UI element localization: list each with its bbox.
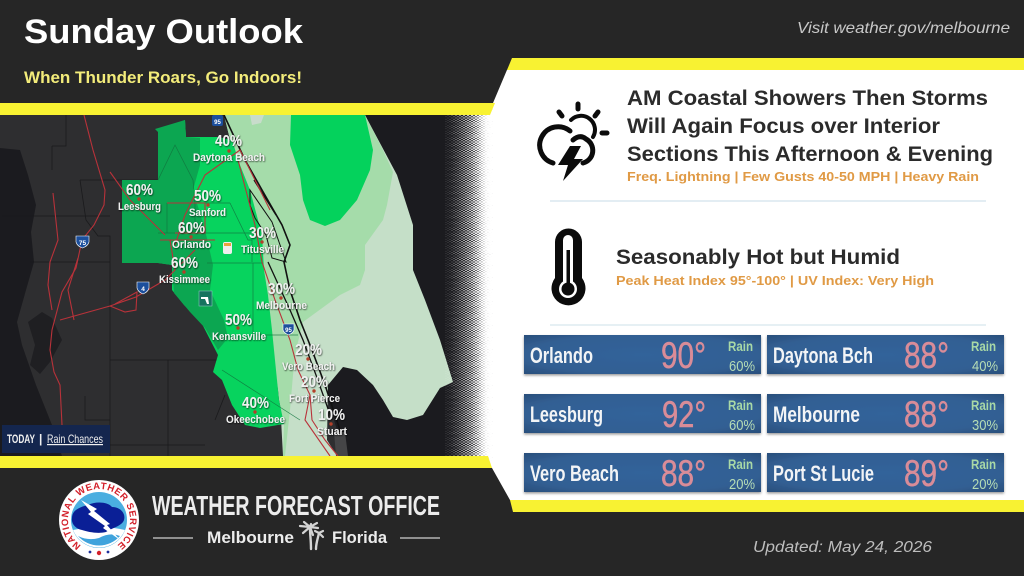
yellow band: top left bbox=[0, 103, 495, 115]
storm details: Freq. Lightning | Few Gusts 40-50 MPH | Heavy Rain bbox=[627, 169, 979, 184]
halftone transition bbox=[446, 100, 492, 470]
tile: Vero Beach: 88° bbox=[661, 453, 706, 494]
tile: Daytona Bch: Rain bbox=[971, 338, 996, 354]
tile: Vero Beach: Vero Beach bbox=[530, 461, 619, 486]
icon: palm tree bbox=[300, 522, 323, 549]
tile: Melbourne: Melbourne bbox=[773, 402, 860, 427]
icon: interstate 95 shield north bbox=[212, 115, 223, 126]
icon: interstate 75 shield bbox=[76, 236, 89, 248]
website link: Visit weather.gov/melbourne bbox=[797, 20, 1010, 37]
map: dark land south east bbox=[334, 432, 348, 456]
map: county lines bbox=[2, 115, 225, 456]
map: city labels: 10% bbox=[318, 407, 345, 424]
map: legend tag bbox=[2, 425, 110, 453]
logo text: location line bbox=[153, 522, 440, 549]
tile: Melbourne: 30% bbox=[972, 418, 998, 434]
map: darker green rain area bbox=[122, 120, 228, 350]
map: city labels bbox=[118, 133, 347, 438]
tile: Vero Beach: 20% bbox=[729, 477, 755, 493]
tile: Orlando: Rain bbox=[728, 338, 753, 354]
map: coastline bbox=[224, 115, 347, 456]
tile: Port St Lucie: Rain bbox=[971, 456, 996, 472]
heading: storms bbox=[627, 86, 993, 166]
map: city labels: 50% bbox=[225, 312, 252, 329]
panel: right white panel bbox=[493, 70, 1024, 500]
tile: Orlando: 90° bbox=[661, 335, 706, 376]
tile: Port St Lucie: Port St Lucie bbox=[773, 461, 874, 486]
map: city labels: 50% bbox=[194, 188, 221, 205]
tile: Daytona Bch: Daytona Bch bbox=[773, 343, 873, 368]
map: city labels: 20% bbox=[295, 342, 322, 359]
logo text: location line: Melbourne bbox=[207, 528, 294, 547]
icon: interstate 95 shield south bbox=[283, 324, 294, 335]
heading: heat: Seasonably Hot but Humid bbox=[616, 246, 900, 269]
tile: Daytona Bch bbox=[767, 335, 1004, 376]
panel: rain chance map bbox=[0, 115, 500, 456]
tile: Port St Lucie bbox=[767, 453, 1004, 494]
map: city labels: Daytona Beach bbox=[193, 152, 265, 164]
icon: interstate 75 shield: 75 bbox=[79, 240, 86, 247]
tile: Leesburg: Leesburg bbox=[530, 402, 603, 427]
tile: Melbourne bbox=[767, 394, 1004, 435]
map: city labels: 40% bbox=[242, 395, 269, 412]
map: pale patch bbox=[250, 115, 264, 125]
tile: Orlando bbox=[524, 335, 761, 376]
map: city labels: Kenansville bbox=[212, 331, 266, 343]
subtitle: When Thunder Roars, Go Indoors! bbox=[24, 68, 302, 87]
map: city labels: Fort Pierce bbox=[289, 393, 340, 405]
map: rain area very light bbox=[224, 115, 453, 456]
tile: Daytona Bch: 40% bbox=[972, 359, 998, 375]
yellow band: top right bbox=[507, 58, 1024, 70]
map: city labels: Kissimmee bbox=[159, 274, 210, 286]
icon: interstate 95 shield north: 95 bbox=[214, 120, 221, 126]
tile: Melbourne: Rain bbox=[971, 397, 996, 413]
map: city labels: 30% bbox=[268, 281, 295, 298]
header background shapes bbox=[0, 0, 1024, 103]
icon: interstate 95 shield south: 95 bbox=[285, 328, 292, 334]
yellow band: bottom right bbox=[510, 500, 1024, 512]
heading: storms: AM Coastal Showers Then Storms bbox=[627, 86, 988, 110]
updated date: Updated: May 24, 2026 bbox=[753, 539, 932, 556]
title: Sunday Outlook bbox=[24, 13, 303, 51]
map: city labels: 60% bbox=[178, 220, 205, 237]
icon: NWS logo: NATIONAL WEATHER SERVICE bbox=[62, 482, 137, 550]
heat details: Peak Heat Index 95°-100° | UV Index: Very High bbox=[616, 273, 934, 288]
map: city labels: 40% bbox=[215, 133, 242, 150]
tile: Leesburg: Rain bbox=[728, 397, 753, 413]
map: city labels: Stuart bbox=[317, 426, 347, 438]
map: legend tag: TODAY bbox=[7, 432, 35, 446]
tile: Vero Beach: Rain bbox=[728, 456, 753, 472]
map: offshore bright green blob bbox=[290, 115, 373, 226]
tile: Daytona Bch: 88° bbox=[904, 335, 949, 376]
tile: Vero Beach bbox=[524, 453, 761, 494]
icon: sun cloud and lightning bbox=[540, 104, 607, 181]
logo text: Weather Forecast Office: WEATHER FORECAST OFFICE bbox=[152, 490, 440, 521]
yellow band: bottom left bbox=[0, 456, 492, 468]
heading: storms: Will Again Focus over Interior bbox=[627, 114, 941, 138]
tile: Leesburg: 92° bbox=[662, 394, 706, 435]
icon: thermometer bbox=[552, 228, 586, 305]
tile: Orlando: Orlando bbox=[530, 343, 593, 368]
icon: interstate 4 shield bbox=[137, 282, 149, 294]
map: rain area light green bbox=[224, 115, 393, 456]
map: county lines over green bbox=[158, 145, 300, 420]
map: city labels: Vero Beach bbox=[282, 361, 335, 373]
heading: storms: Sections This Afternoon & Evening bbox=[627, 142, 993, 166]
tile: Port St Lucie: 89° bbox=[904, 453, 949, 494]
tile: Leesburg bbox=[524, 394, 761, 435]
map: city labels: 60% bbox=[126, 182, 153, 199]
map: legend tag: Rain Chances bbox=[47, 432, 103, 446]
map: city labels: Orlando bbox=[172, 239, 211, 251]
map: land bbox=[0, 115, 345, 456]
map: city labels: Leesburg bbox=[118, 201, 161, 213]
map: bright green rain area bbox=[122, 120, 284, 428]
map: city labels: Melbourne bbox=[256, 300, 307, 312]
icon: Florida turnpike sign bbox=[199, 291, 212, 306]
icon: US 528 shield bbox=[223, 242, 232, 254]
map: tampa bay bbox=[28, 312, 62, 374]
map: roads bbox=[48, 115, 338, 456]
icon: interstate 4 shield: 4 bbox=[141, 286, 145, 293]
map: city labels: Okeechobee bbox=[226, 414, 285, 426]
map: legend tag: | bbox=[39, 432, 42, 446]
map: city labels: 20% bbox=[301, 374, 328, 391]
map: city labels: Titusville bbox=[241, 244, 284, 256]
map: city markers bbox=[137, 149, 333, 426]
tile: Port St Lucie: 20% bbox=[972, 477, 998, 493]
tile: Leesburg: 60% bbox=[729, 418, 755, 434]
tile: Orlando: 60% bbox=[729, 359, 755, 375]
map: city labels: 30% bbox=[249, 225, 276, 242]
map: city labels: Sanford bbox=[189, 207, 226, 219]
tile: Melbourne: 88° bbox=[904, 394, 949, 435]
map: city labels: 60% bbox=[171, 255, 198, 272]
logo text: location line: Florida bbox=[332, 528, 388, 547]
